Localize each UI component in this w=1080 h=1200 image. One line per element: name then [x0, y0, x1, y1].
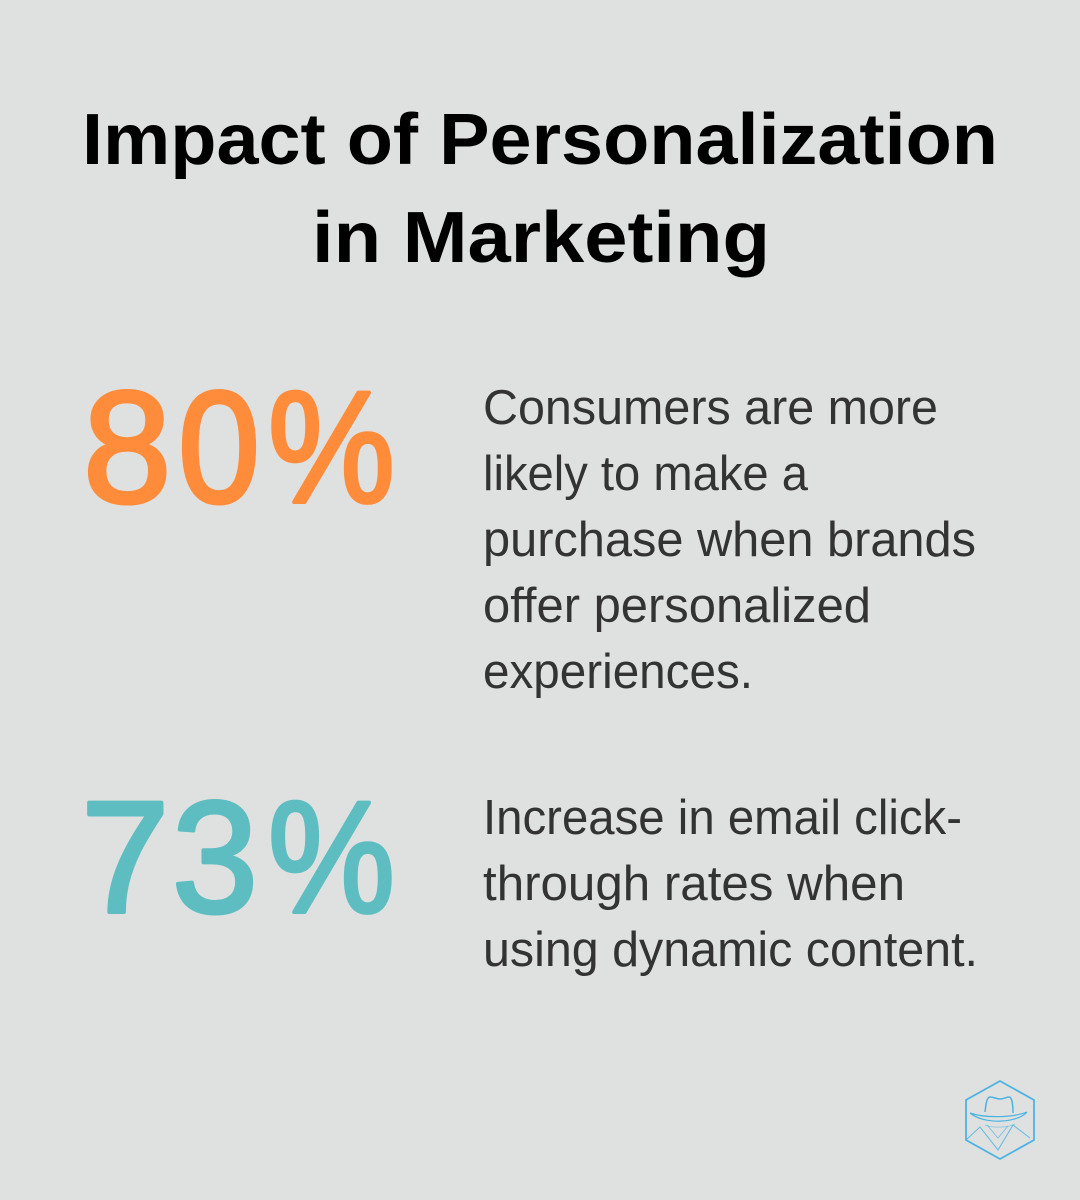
title: Impact of Personalization [82, 100, 998, 180]
stat: 73%: % [268, 768, 395, 946]
stat: 80% [83, 358, 395, 536]
stat: 80%: 8 [83, 358, 171, 536]
stat: 73%: 3 [172, 768, 258, 946]
stat: 80%: 0 [178, 358, 260, 536]
description: 73% stat [483, 791, 978, 977]
description: 73% stat: through rates when [483, 857, 905, 911]
stat: 73% [81, 768, 395, 946]
title [82, 100, 998, 278]
stat: 73%: 7 [81, 768, 169, 946]
stat: 80%: % [268, 358, 395, 536]
description: 80% stat: purchase when brands [483, 513, 976, 567]
description: 73% stat: using dynamic content. [483, 923, 978, 977]
description: 73% stat: Increase in email click- [483, 791, 962, 845]
description: 80% stat: likely to make a [483, 447, 809, 501]
icon: logo hexagon with hat [966, 1081, 1034, 1159]
title: in Marketing [312, 198, 770, 278]
description: 80% stat: Consumers are more [483, 381, 938, 435]
description: 80% stat [483, 381, 976, 699]
description: 80% stat: offer personalized [483, 579, 871, 633]
description: 80% stat: experiences. [483, 645, 753, 699]
